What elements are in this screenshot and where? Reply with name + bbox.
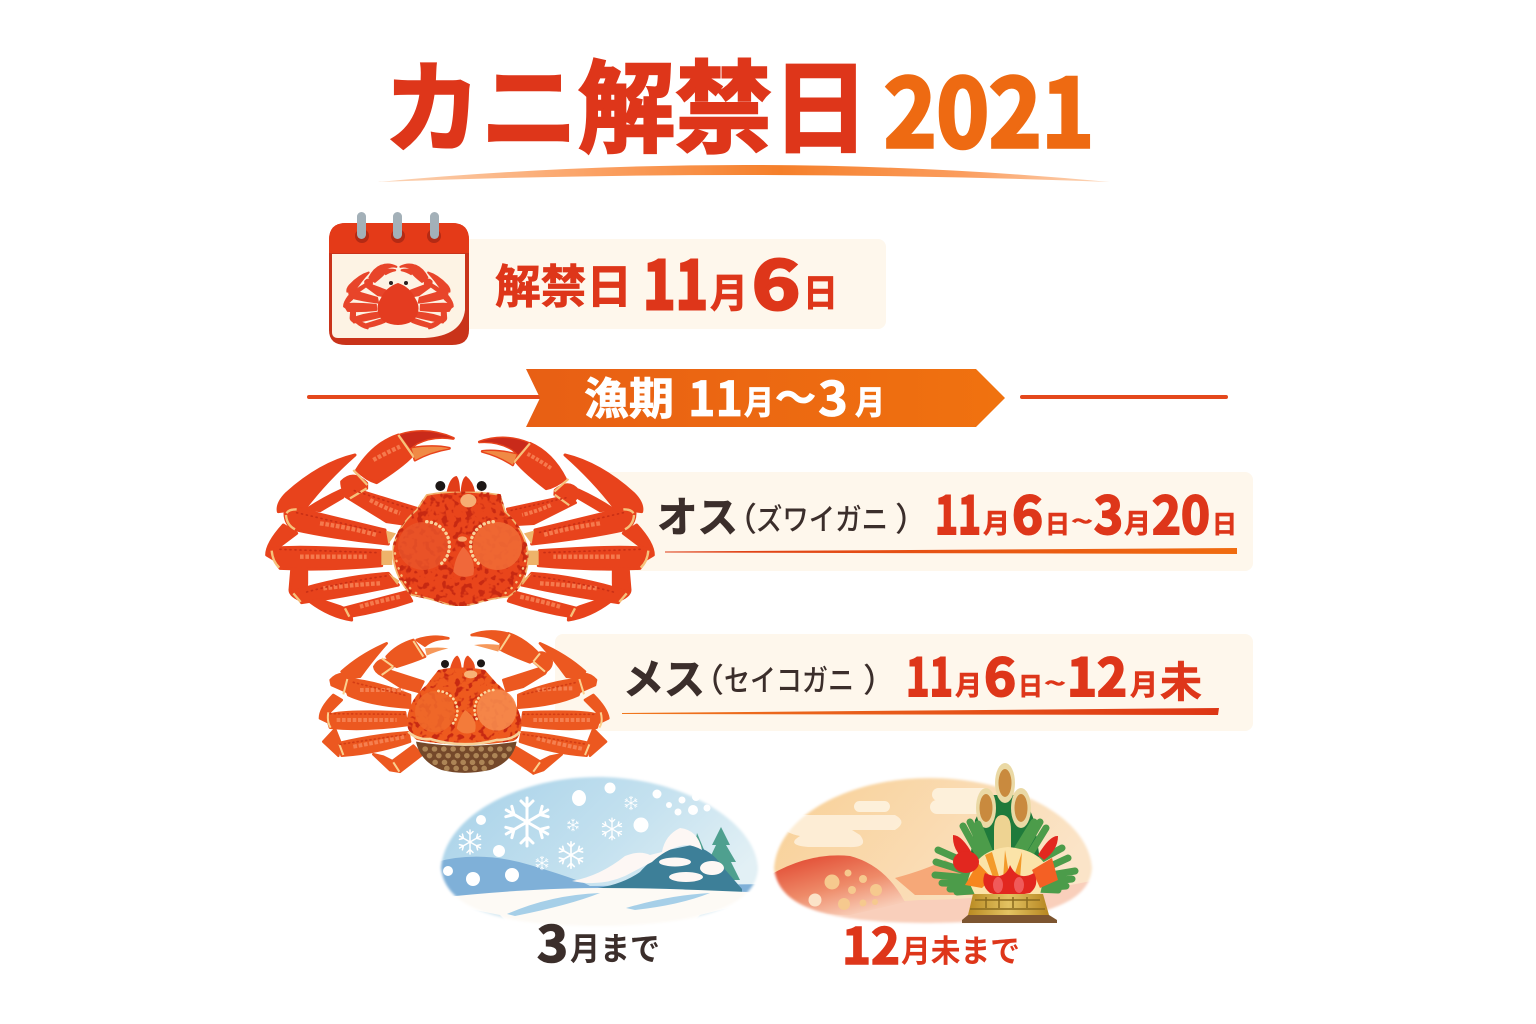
banner background <box>460 239 886 329</box>
calendar page <box>329 223 469 345</box>
female crab legs and claws <box>320 631 608 773</box>
ribbon text: 漁期 11月～3月: 月 <box>855 376 885 424</box>
female label: メス <box>623 646 705 707</box>
panel: male crab dates <box>600 472 1253 571</box>
male date range: 月 <box>1124 502 1151 541</box>
male date range: 日 <box>1045 505 1070 541</box>
title year: 2021: 2021 <box>884 39 1094 175</box>
calendar rings <box>355 212 441 243</box>
male crab legs and claws <box>267 432 653 620</box>
caption: until end of December: 12 <box>842 907 900 979</box>
illustration: new year scene <box>770 772 1096 930</box>
female crab shell <box>407 656 522 745</box>
female species name: ） <box>863 654 896 702</box>
ribbon text: 漁期 11月～3月: 11 <box>688 360 743 430</box>
female panel background <box>555 634 1253 731</box>
male underline <box>665 548 1237 554</box>
male date range: 日 <box>1212 505 1237 541</box>
opening date value: 11月6日 <box>643 233 838 329</box>
male date range: ~ <box>1071 502 1093 537</box>
female underline <box>622 708 1219 715</box>
male date range: 月 <box>983 502 1010 541</box>
caption: until March: 月まで <box>570 924 660 970</box>
icon: calendar with crab <box>329 212 469 345</box>
caption: until March: 3 <box>537 905 568 977</box>
illustration: female seiko crab <box>320 631 608 773</box>
fan <box>965 847 1058 895</box>
female date range: 未 <box>1160 649 1202 710</box>
red hill with plum blossoms <box>770 855 905 915</box>
ribbon arrow <box>526 369 1005 427</box>
male species name: ズワイガニ <box>756 495 888 539</box>
orange distant hill <box>895 860 973 895</box>
title swoosh underline <box>378 165 1110 182</box>
snowy mountain <box>572 828 742 892</box>
male crab eyes <box>435 481 487 491</box>
female date range: 月 <box>955 664 982 703</box>
opening date label: 解禁日 <box>495 251 632 317</box>
illustration: male snow crab <box>267 432 653 620</box>
snow ground <box>454 888 750 927</box>
red berries and ornaments <box>953 835 1058 896</box>
male crab shell <box>393 476 528 606</box>
opening date value: 11月6日: 6 <box>752 233 800 329</box>
illustration: kadomatsu <box>935 763 1075 923</box>
female species name: セイコガニ <box>724 656 854 700</box>
clouds <box>785 788 992 847</box>
male panel background <box>600 472 1253 571</box>
female species name: （ <box>691 654 724 702</box>
ribbon text: 漁期 11月～3月: 月 <box>744 376 774 424</box>
panel: female crab dates <box>555 634 1253 731</box>
caption: until end of December <box>842 907 1020 979</box>
warm sky <box>772 776 1093 901</box>
opening date value: 11月6日: 日 <box>803 263 838 317</box>
female date range: 6 <box>984 636 1016 711</box>
opening date value: 11月6日: 月 <box>710 261 748 319</box>
female date range: 11 <box>906 636 953 711</box>
bamboo stalks <box>970 763 1040 860</box>
right rule <box>1020 395 1228 399</box>
ribbon text: 漁期 11月～3月: 漁期 <box>584 363 674 427</box>
male species name: ） <box>895 493 928 541</box>
female crab eggs <box>416 742 517 773</box>
distant blue hills <box>440 856 755 896</box>
calendar crab <box>344 265 453 328</box>
female date range: 日 <box>1018 667 1043 703</box>
male species name <box>724 493 928 541</box>
pine trees <box>692 827 740 880</box>
title text: カニ解禁日: カニ解禁日 <box>384 28 869 173</box>
caption: until March <box>537 905 660 977</box>
opening date value: 11月6日: 11 <box>643 233 708 329</box>
female date range: 月 <box>1130 662 1158 704</box>
female species name <box>691 654 896 702</box>
male date range <box>935 474 1237 549</box>
ribbon text: 漁期 11月～3月 <box>584 360 885 430</box>
illustration: winter snow scene <box>439 776 758 924</box>
female crab leg details <box>328 634 602 772</box>
pine needles <box>935 822 1075 892</box>
winter sky <box>440 776 758 886</box>
fishing season ribbon <box>307 360 1228 430</box>
title <box>378 28 1110 182</box>
female crab eyes <box>441 659 485 668</box>
ribbon text: 漁期 11月～3月: ～ <box>775 366 816 424</box>
left rule <box>307 395 542 399</box>
snowflakes <box>458 796 638 870</box>
ribbon text: 漁期 11月～3月: 3 <box>818 360 848 430</box>
falling snow dots <box>443 782 710 886</box>
female date range <box>906 636 1202 711</box>
male label: オス <box>657 484 738 545</box>
male date range: 20 <box>1152 474 1210 549</box>
male date range: 3 <box>1094 474 1123 549</box>
female date range: ~ <box>1044 664 1066 699</box>
male date range: 6 <box>1012 474 1043 549</box>
banner: opening date <box>460 233 886 329</box>
caption: until end of December: 月未まで <box>901 926 1020 971</box>
female date range: 12 <box>1067 636 1127 711</box>
male species name: （ <box>724 493 757 541</box>
male date range: 11 <box>935 474 981 549</box>
wooden barrel <box>962 894 1057 923</box>
pink foreground <box>832 882 1088 923</box>
